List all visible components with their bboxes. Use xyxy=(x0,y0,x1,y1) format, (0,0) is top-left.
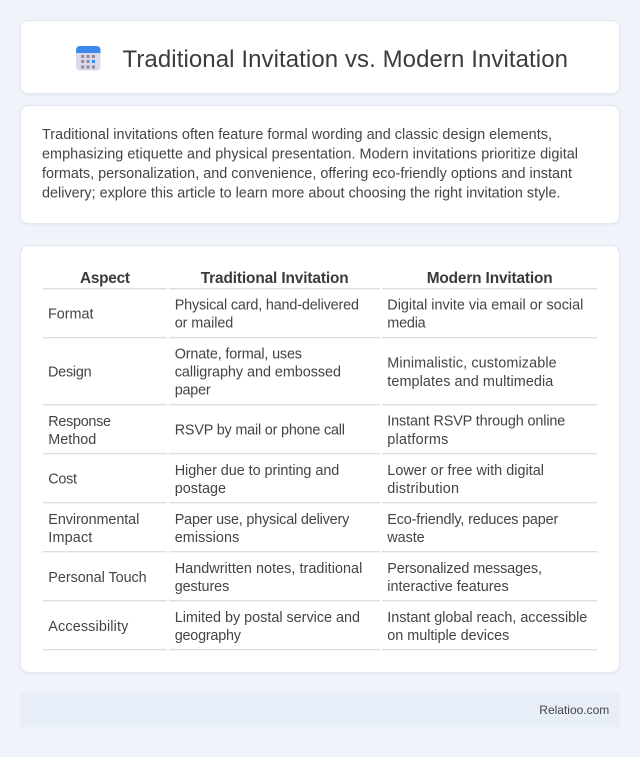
table row: cost: Cost xyxy=(48,472,77,488)
table header row xyxy=(43,270,597,289)
table row: design: Minimalistic, customizable xyxy=(387,356,557,372)
table row: cost: Lower or free with digital xyxy=(387,463,544,479)
table row: personal touch: interactive features xyxy=(387,579,509,595)
table row: response method: Response xyxy=(48,414,111,430)
text block: introduction paragraph: emphasizing etiquette and physical presentation. Modern invitations prioritize digital xyxy=(42,146,578,162)
table row: accessibility: on multiple devices xyxy=(387,628,509,644)
text block: introduction paragraph: delivery; explore this article to learn more about choosing the right invitation style. xyxy=(42,186,560,202)
footer bar xyxy=(20,693,620,727)
table row: cost: Higher due to printing and xyxy=(175,463,339,479)
table row: response method xyxy=(43,414,597,454)
table row: design: calligraphy and embossed xyxy=(175,365,341,381)
table row: format: Digital invite via email or social xyxy=(387,297,583,313)
table header row: Aspect xyxy=(80,270,130,287)
table row: cost: postage xyxy=(175,481,226,497)
footer attribution: Relatioo.com xyxy=(539,703,609,717)
table row: format: Format xyxy=(48,306,94,322)
table row: environmental impact: Environmental xyxy=(48,512,139,528)
table row: accessibility: Accessibility xyxy=(48,619,129,635)
table row: cost xyxy=(43,463,597,503)
text block: introduction paragraph: Traditional invitations often feature formal wording and classic design elements, xyxy=(42,127,552,143)
panel: introduction xyxy=(20,106,620,224)
table row: design: Ornate, formal, uses xyxy=(175,347,302,363)
table row: personal touch xyxy=(43,561,597,601)
table row: format: Physical card, hand-delivered xyxy=(175,297,359,313)
table row: format xyxy=(43,297,597,338)
table row: personal touch: Handwritten notes, traditional xyxy=(175,561,362,577)
table row: design: paper xyxy=(175,383,211,399)
table row: accessibility: Limited by postal service and xyxy=(175,610,360,626)
panel: title header xyxy=(20,20,620,94)
table row: environmental impact: waste xyxy=(386,530,425,546)
table row: environmental impact: Eco-friendly, reduces paper xyxy=(387,512,559,528)
table row: cost: distribution xyxy=(387,481,459,497)
table row: design xyxy=(43,347,597,405)
table row: design: Design xyxy=(48,365,92,381)
table row: environmental impact xyxy=(43,512,597,552)
table row: response method: platforms xyxy=(387,432,448,448)
table row: environmental impact: Paper use, physical delivery xyxy=(175,512,350,528)
table header row: Traditional Invitation xyxy=(201,270,349,287)
table row: accessibility xyxy=(43,610,597,650)
table row: response method: RSVP by mail or phone call xyxy=(175,423,345,439)
text block: introduction paragraph: formats, personalization, and convenience, offering eco-friendly options and instant xyxy=(42,166,572,182)
title: Traditional Invitation vs. Modern Invitation xyxy=(122,46,568,73)
table row: personal touch: gestures xyxy=(175,579,229,595)
table row: environmental impact: Impact xyxy=(48,530,92,546)
table row: environmental impact: emissions xyxy=(175,530,239,546)
table row: design: templates and multimedia xyxy=(387,374,553,390)
panel: comparison table xyxy=(20,246,620,672)
table row: accessibility: geography xyxy=(175,628,242,644)
table row: format: media xyxy=(387,316,426,332)
text block: introduction paragraph xyxy=(42,127,578,202)
table row: personal touch: Personal Touch xyxy=(48,570,147,586)
table row: response method: Instant RSVP through online xyxy=(387,414,565,430)
table row: personal touch: Personalized messages, xyxy=(387,561,542,577)
icon: calendar xyxy=(76,46,100,70)
table row: format: or mailed xyxy=(175,316,233,332)
table row: response method: Method xyxy=(48,432,96,448)
table header row: Modern Invitation xyxy=(427,270,553,287)
table row: accessibility: Instant global reach, accessible xyxy=(387,610,587,626)
